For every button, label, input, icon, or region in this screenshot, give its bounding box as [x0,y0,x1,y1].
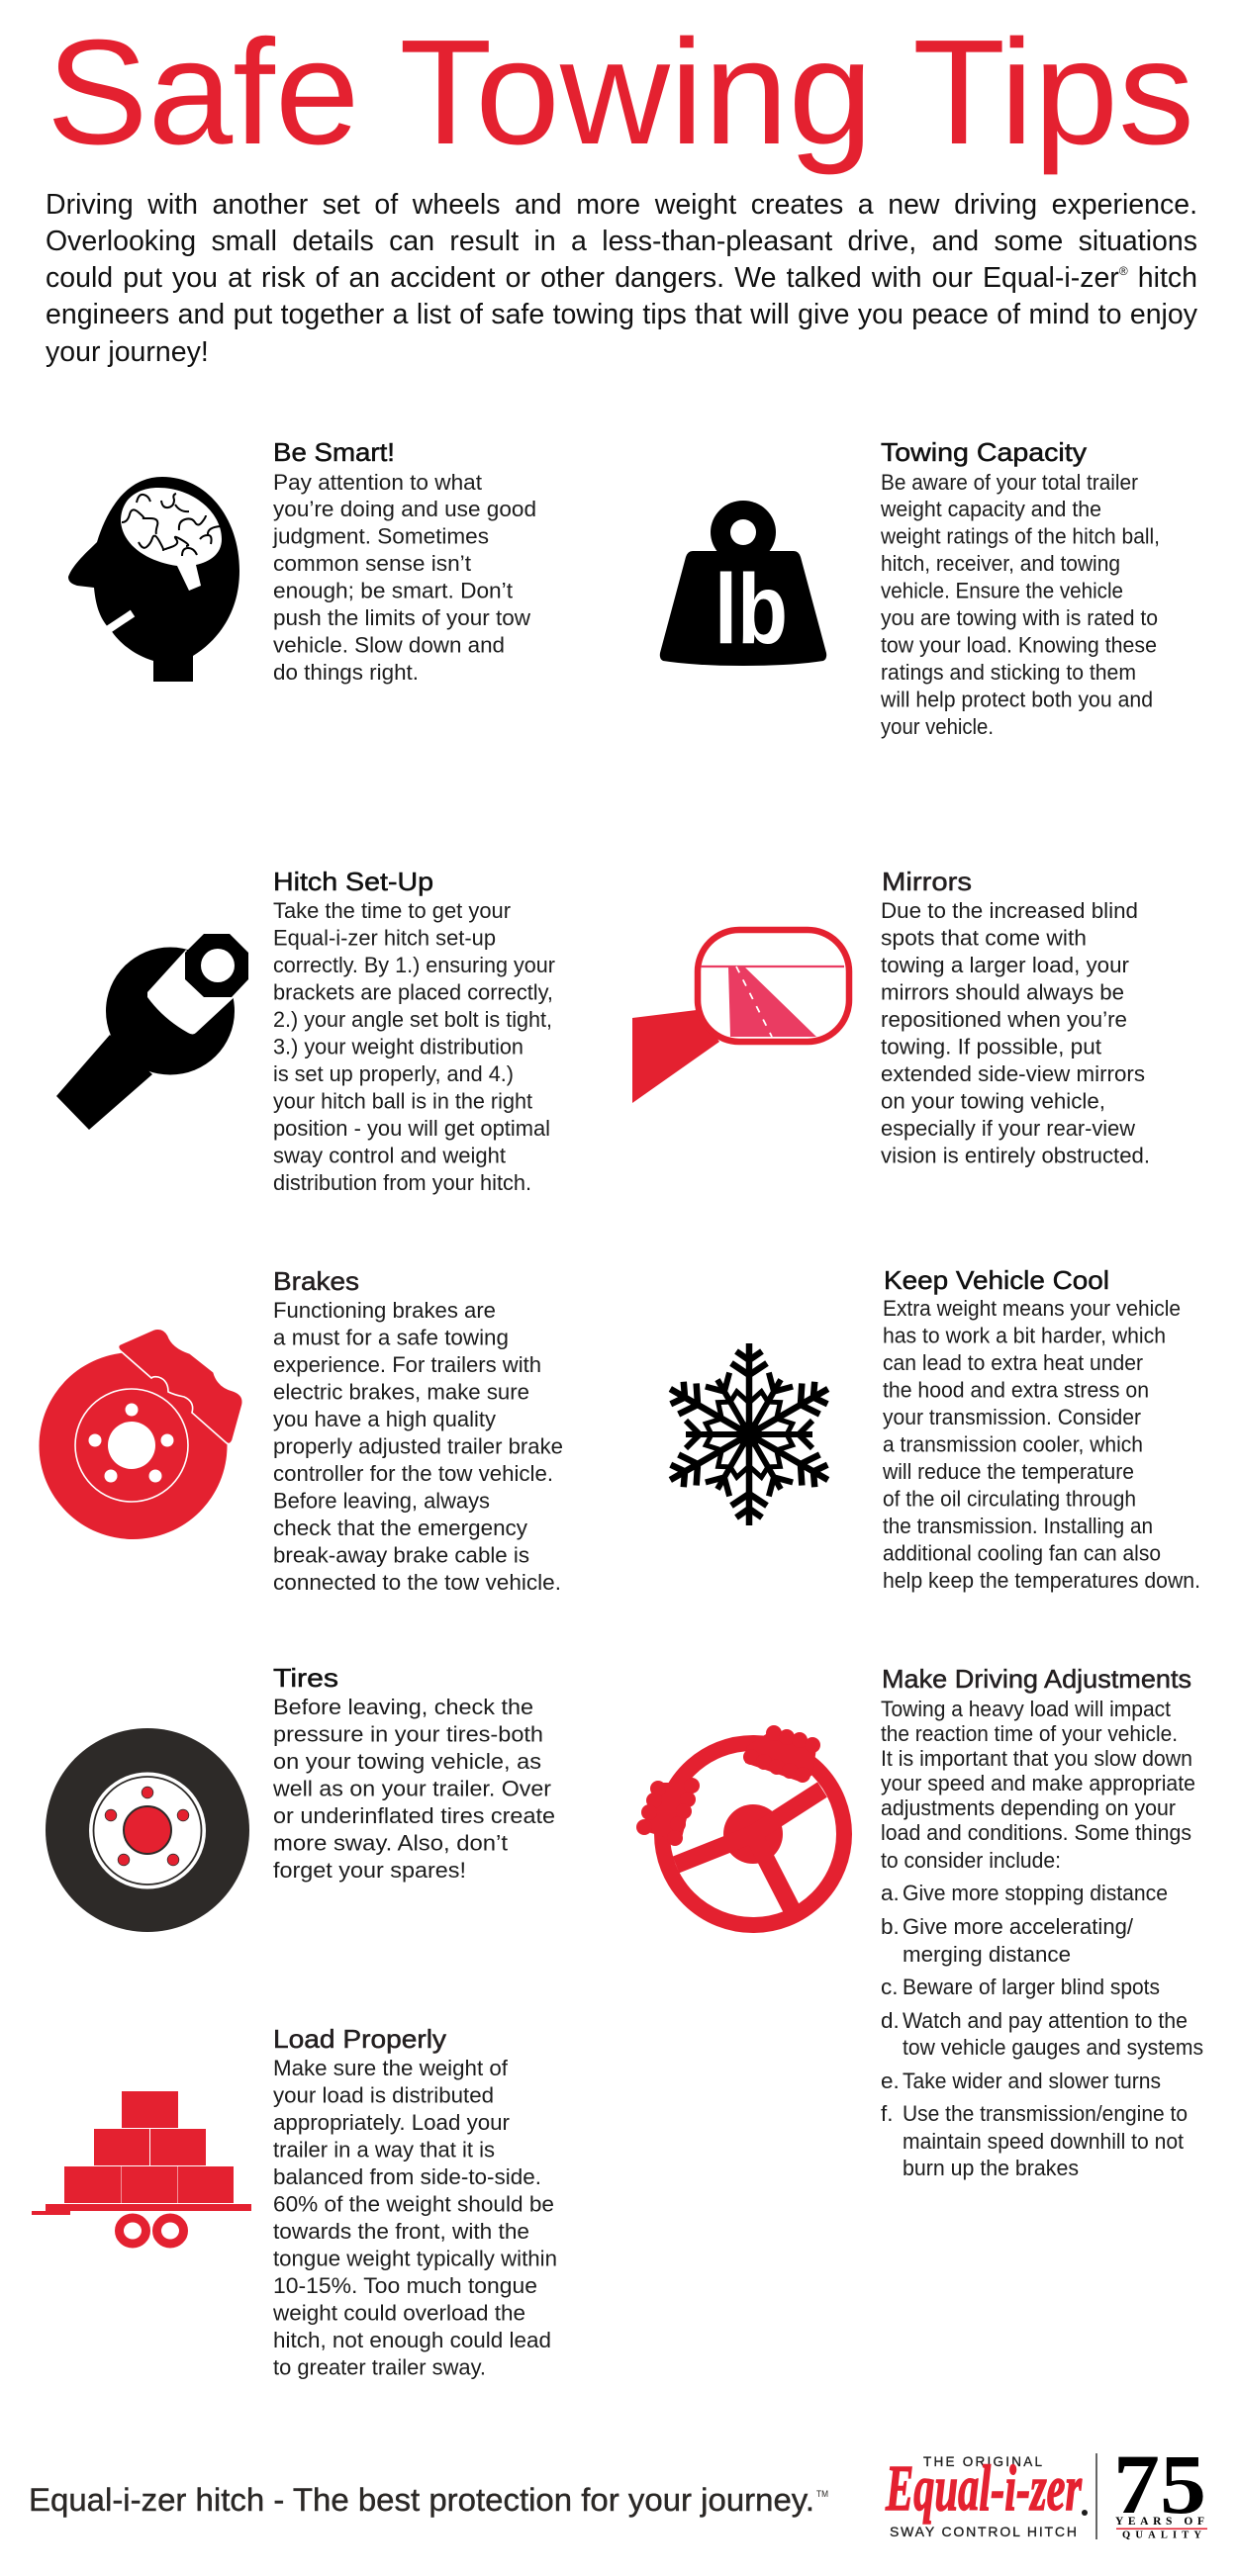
text: Towing Capacity body: hitch, receiver, and towing [881,551,1120,576]
title: Safe Towing Tips [47,8,1194,175]
text: Hitch Set-Up body: 2.) your angle set bolt is tight, [273,1007,552,1032]
text: Keep Vehicle Cool body: can lead to extra heat under [883,1350,1143,1375]
icon: wrench and nut [56,934,248,1130]
text: Hitch Set-Up body: distribution from your hitch. [273,1170,531,1195]
text: Brakes body: a must for a safe towing [273,1326,509,1349]
icon: steering wheel with hands [636,1725,844,1925]
text: Load Properly body: 60% of the weight should be [273,2192,554,2216]
text: Be Smart body: Pay attention to what [273,470,483,495]
intro text block: your journey! [46,336,209,368]
text: Be Smart body: you’re doing and use good [273,497,536,521]
text: Mirrors body: vision is entirely obstructed. [881,1144,1150,1167]
logo: Equal-i-zer: SWAY CONTROL HITCH [890,2524,1077,2539]
text: Make Driving Adjustments intro: It is important that you slow down [881,1746,1192,1771]
logo: Equal-i-zer: Equal-i-zer [885,2452,1083,2525]
text: Tires body: on your towing vehicle, as [273,1749,541,1774]
text: Towing Capacity body: vehicle. Ensure the vehicle [881,578,1123,603]
text: Hitch Set-Up body: Take the time to get your [273,898,511,923]
heading: Make Driving Adjustments: Make Driving Adjustments [882,1664,1191,1694]
text: Be Smart body: enough; be smart. Don’t [273,578,514,603]
text: Mirrors body: especially if your rear-view [881,1116,1136,1141]
logo: 75 years of quality: 75 [1113,2437,1206,2531]
text: Towing Capacity body: weight ratings of the hitch ball, [880,524,1160,548]
text: Mirrors body: spots that come with [881,926,1087,950]
text: Be Smart body: do things right. [273,660,419,685]
heading: Brakes: Brakes [273,1266,359,1296]
text: Tires body [272,1695,555,1883]
text: Load Properly body: weight could overload the [272,2301,525,2325]
panel: Load Properly [32,2024,557,2380]
text: Make Driving Adjustments intro: load and conditions. Some things [881,1820,1191,1845]
intro text block: Driving with another set of wheels and more weight creates a new driving experience. [46,188,1197,220]
intro text block: could put you at risk of an accident or other dangers. We talked with our Equal-i-zer® hitch [46,262,1197,294]
text: Hitch Set-Up body: brackets are placed correctly, [273,979,553,1005]
text: Brakes body [273,1298,563,1595]
text: Towing Capacity body: Be aware of your total trailer [881,470,1138,495]
text: Load Properly body: balanced from side-to-side. [273,2164,541,2189]
list: driving adjustments: burn up the brakes [903,2156,1079,2180]
text: Load Properly body: tongue weight typically within [273,2246,557,2271]
text: Hitch Set-Up body [273,898,555,1195]
text: Towing Capacity body: ratings and sticking to them [881,660,1136,685]
text: Keep Vehicle Cool body: the hood and extra stress on [883,1377,1149,1403]
heading: Mirrors: Mirrors [882,867,972,896]
list: driving adjustments: d. [881,2008,900,2033]
text: Hitch Set-Up body: sway control and weight [273,1144,507,1167]
text: Tires body: pressure in your tires-both [273,1721,543,1747]
icon: snowflake [661,1343,837,1525]
icon: loaded trailer [32,2091,251,2244]
text: Load Properly body [272,2056,557,2380]
text: Hitch Set-Up body: your hitch ball is in the right [273,1088,533,1114]
text: Brakes body: Before leaving, always [273,1488,490,1514]
text: Towing Capacity body: weight capacity and the [880,497,1101,521]
text: Load Properly body: 10-15%. Too much tongue [273,2273,537,2298]
text: Mirrors body: on your towing vehicle, [881,1088,1105,1114]
list: driving adjustments [881,1881,1203,2180]
panel: Make Driving Adjustments [636,1664,1203,2180]
text: Tires body: well as on your trailer. Over [272,1777,552,1800]
text: Towing Capacity body: your vehicle. [881,714,994,739]
text: Be Smart body: push the limits of your tow [273,605,531,630]
icon: tire [46,1728,249,1932]
text: Keep Vehicle Cool body: of the oil circulating through [883,1486,1136,1512]
text: Brakes body: break-away brake cable is [273,1543,529,1567]
logo: Equal-i-zer [885,2452,1088,2539]
text: Brakes body: Functioning brakes are [273,1298,496,1323]
text: Load Properly body: appropriately. Load your [273,2110,510,2135]
intro text block: Overlooking small details can result in a less-than-pleasant drive, and some situations [46,226,1197,257]
icon: weight: lb [714,554,788,665]
text: Hitch Set-Up body: Equal-i-zer hitch set-up [273,926,496,950]
icon: brake disc and caliper [40,1329,242,1539]
text: Keep Vehicle Cool body: your transmission. Consider [883,1405,1141,1429]
text: Make Driving Adjustments intro: the reaction time of your vehicle. [881,1721,1178,1746]
logo: 75 years of quality: QUALITY [1122,2530,1201,2540]
list: driving adjustments: c. [881,1975,899,1999]
text: Load Properly body: towards the front, with the [273,2219,529,2244]
text: Keep Vehicle Cool body: additional cooling fan can also [883,1541,1161,1565]
logo: Equal-i-zer: THE ORIGINAL [923,2454,1042,2469]
text: Hitch Set-Up body: position - you will get optimal [273,1116,550,1141]
text: Be Smart body: judgment. Sometimes [272,524,489,548]
list: driving adjustments: e. [881,2069,900,2093]
text: Make Driving Adjustments intro: Towing a heavy load will impact [881,1697,1172,1721]
icon: head with brain [68,477,239,682]
panel: Be Smart [68,437,536,685]
text: Brakes body: check that the emergency [273,1516,528,1540]
text: Brakes body: properly adjusted trailer brake [273,1434,563,1458]
footer tagline: TM [816,2489,828,2499]
heading: Keep Vehicle Cool: Keep Vehicle Cool [884,1265,1109,1295]
text: Tires body: forget your spares! [273,1858,466,1883]
list: driving adjustments: b. [881,1914,900,1939]
text: Towing Capacity body: you are towing with is rated to [881,605,1158,630]
list: driving adjustments: Use the transmission/engine to [903,2101,1188,2126]
text: Keep Vehicle Cool body: the transmission. Installing an [883,1514,1153,1538]
text: Brakes body: experience. For trailers with [273,1352,541,1377]
text: Hitch Set-Up body: correctly. By 1.) ensuring your [273,953,555,977]
heading: Load Properly: Load Properly [273,2024,446,2054]
list: driving adjustments: a. [881,1881,900,1905]
text: Keep Vehicle Cool body: Extra weight means your vehicle [883,1296,1181,1321]
logo: 75 years of quality: YEARS OF [1115,2516,1204,2528]
text: Tires body: or underinflated tires create [273,1803,555,1828]
text: Load Properly body: hitch, not enough could lead [273,2328,551,2352]
panel: Towing Capacity [660,437,1160,739]
panel: Hitch Set-Up [56,867,555,1195]
text: Brakes body: controller for the tow vehicle. [273,1461,553,1486]
footer tagline: Equal-i-zer hitch - The best protection for your journey. [29,2482,814,2518]
text: Keep Vehicle Cool body: help keep the temperatures down. [883,1568,1200,1593]
text: Make Driving Adjustments intro: your speed and make appropriate [881,1771,1195,1795]
text: Mirrors body: Due to the increased blind [881,898,1138,923]
list: driving adjustments: Beware of larger blind spots [903,1975,1160,1999]
text: Make Driving Adjustments intro: to consider include: [881,1848,1061,1873]
text: Hitch Set-Up body: is set up properly, and 4.) [273,1061,514,1086]
list: driving adjustments: Give more stopping distance [903,1881,1168,1905]
text: Load Properly body: your load is distributed [273,2083,494,2107]
text: Load Properly body: Make sure the weight of [273,2056,509,2080]
panel: Tires [46,1663,555,1932]
text: Keep Vehicle Cool body [882,1296,1200,1593]
list: driving adjustments: Give more accelerating/ [903,1914,1134,1939]
text: Be Smart body: vehicle. Slow down and [273,633,505,657]
list: driving adjustments: maintain speed downhill to not [903,2129,1185,2154]
text: Tires body: Before leaving, check the [273,1695,533,1719]
heading: Be Smart!: Be Smart! [273,437,395,467]
panel: Brakes [40,1266,563,1595]
text: Hitch Set-Up body: 3.) your weight distribution [273,1035,523,1058]
text: Keep Vehicle Cool body: a transmission cooler, which [883,1432,1143,1456]
text: Towing Capacity body: will help protect both you and [880,687,1153,712]
icon: weight [660,501,826,666]
text: Keep Vehicle Cool body: has to work a bit harder, which [883,1324,1166,1347]
text: Brakes body: connected to the tow vehicle. [273,1570,561,1595]
list: driving adjustments: Take wider and slower turns [903,2069,1161,2093]
list: driving adjustments: f. [881,2101,894,2126]
text: Mirrors body: extended side-view mirrors [881,1061,1145,1086]
intro text block: engineers and put together a list of safe towing tips that will give you peace of mind to enjoy [46,299,1197,330]
text: Be Smart body [272,470,536,685]
text: Mirrors body: towing a larger load, your [881,953,1129,977]
list: driving adjustments: Watch and pay attention to the [903,2008,1188,2033]
text: Mirrors body [881,898,1150,1167]
heading: Tires: Tires [273,1663,338,1693]
text: Tires body: more sway. Also, don’t [273,1830,509,1856]
text: Mirrors body: mirrors should always be [881,979,1124,1005]
text: Towing Capacity body: tow your load. Knowing these [881,633,1157,657]
heading: Hitch Set-Up: Hitch Set-Up [273,867,433,896]
panel: Keep Vehicle Cool [661,1265,1200,1593]
heading: Towing Capacity: Towing Capacity [881,437,1087,467]
text: Load Properly body: trailer in a way that it is [273,2137,495,2162]
list: driving adjustments: tow vehicle gauges and systems [903,2035,1203,2060]
text: Towing Capacity body [880,470,1160,739]
text: Be Smart body: common sense isn’t [273,551,472,576]
text: Load Properly body: to greater trailer sway. [273,2354,486,2380]
text: Brakes body: electric brakes, make sure [273,1379,529,1405]
text: Keep Vehicle Cool body: will reduce the temperature [882,1459,1134,1484]
text: Brakes body: you have a high quality [273,1407,497,1431]
list: driving adjustments: merging distance [903,1942,1071,1967]
text: Mirrors body: repositioned when you’re [881,1007,1127,1032]
text: Mirrors body: towing. If possible, put [881,1035,1102,1058]
panel: Mirrors [632,867,1150,1167]
text: Make Driving Adjustments intro: adjustments depending on your [881,1795,1176,1820]
text: Make Driving Adjustments intro [881,1697,1195,1873]
icon: side mirror [632,930,849,1103]
intro text block [46,188,1197,368]
